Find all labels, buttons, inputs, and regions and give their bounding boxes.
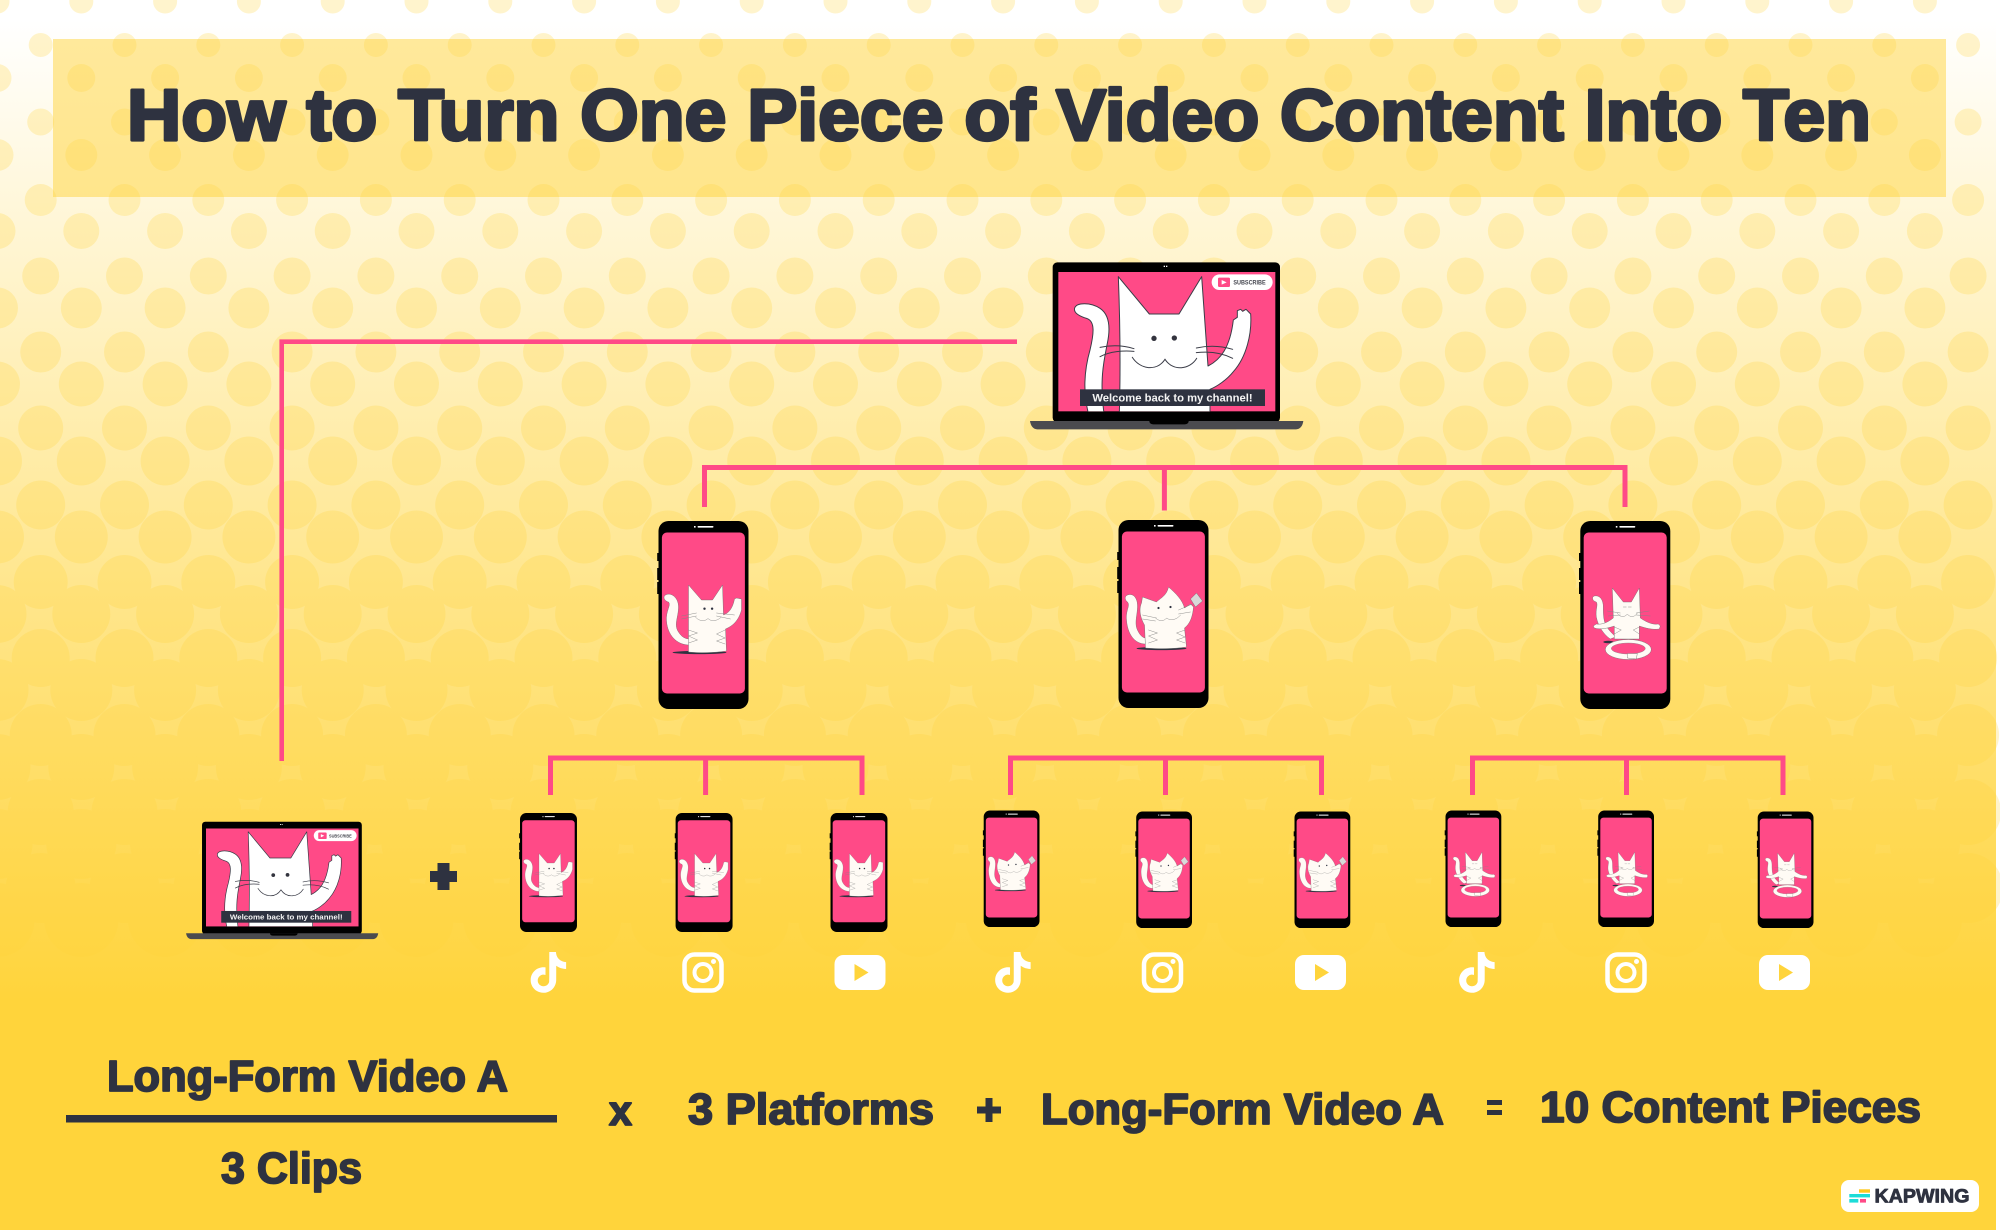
equation: long-form video: Long-Form Video A (1041, 1085, 1444, 1134)
title banner (53, 39, 1946, 197)
icon: YouTube (1759, 955, 1810, 990)
equation: 3 platforms: 3 Platforms (688, 1085, 934, 1134)
laptop: long-form video result (186, 822, 378, 939)
equation: times: x (609, 1087, 633, 1134)
icon: YouTube (1295, 955, 1346, 990)
phones: clip 1 platforms (519, 813, 887, 932)
equation: plus (977, 1098, 1001, 1122)
icon: Instagram (684, 954, 722, 990)
phone: clip 1 (657, 521, 748, 709)
numerator: Long-Form Video A (107, 1052, 508, 1101)
connector: top laptop to three clips (704, 468, 1625, 510)
small subscribe button text: SUBSCRIBE (329, 833, 352, 838)
icon: TikTok (1459, 952, 1495, 993)
icon: Instagram (1608, 954, 1644, 990)
Kapwing logo badge (1841, 1180, 1979, 1212)
phones: clip 2 platforms (983, 810, 1350, 928)
icon: TikTok (995, 952, 1031, 993)
laptop: source long-form video (1030, 262, 1303, 429)
phone: clip 3 (1579, 521, 1670, 709)
title: How to Turn One Piece of Video Content Into Ten (127, 76, 1871, 156)
connector: clip 3 to platforms (1472, 758, 1783, 795)
equation: result: 10 Content Pieces (1540, 1083, 1921, 1132)
equation: fraction (66, 1052, 557, 1193)
phones: clip 3 platforms (1445, 810, 1814, 928)
small laptop caption: Welcome back to my channel! (230, 913, 343, 922)
laptop caption: Welcome back to my channel! (1092, 393, 1253, 405)
equation: equals (1487, 1100, 1502, 1115)
phone: clip 2 (1117, 520, 1208, 708)
icon: TikTok (531, 952, 566, 993)
subscribe button text: SUBSCRIBE (1233, 280, 1266, 287)
plus icon (430, 863, 457, 890)
denominator: 3 Clips (221, 1144, 362, 1193)
icon: YouTube (834, 955, 886, 990)
connector: clip 1 to platforms (550, 758, 862, 795)
connector: clip 2 to platforms (1010, 758, 1322, 795)
icon: Instagram (1144, 954, 1181, 990)
Kapwing wordmark: KAPWING (1874, 1187, 1970, 1208)
connector: long-form video down to final laptop (282, 342, 1017, 761)
